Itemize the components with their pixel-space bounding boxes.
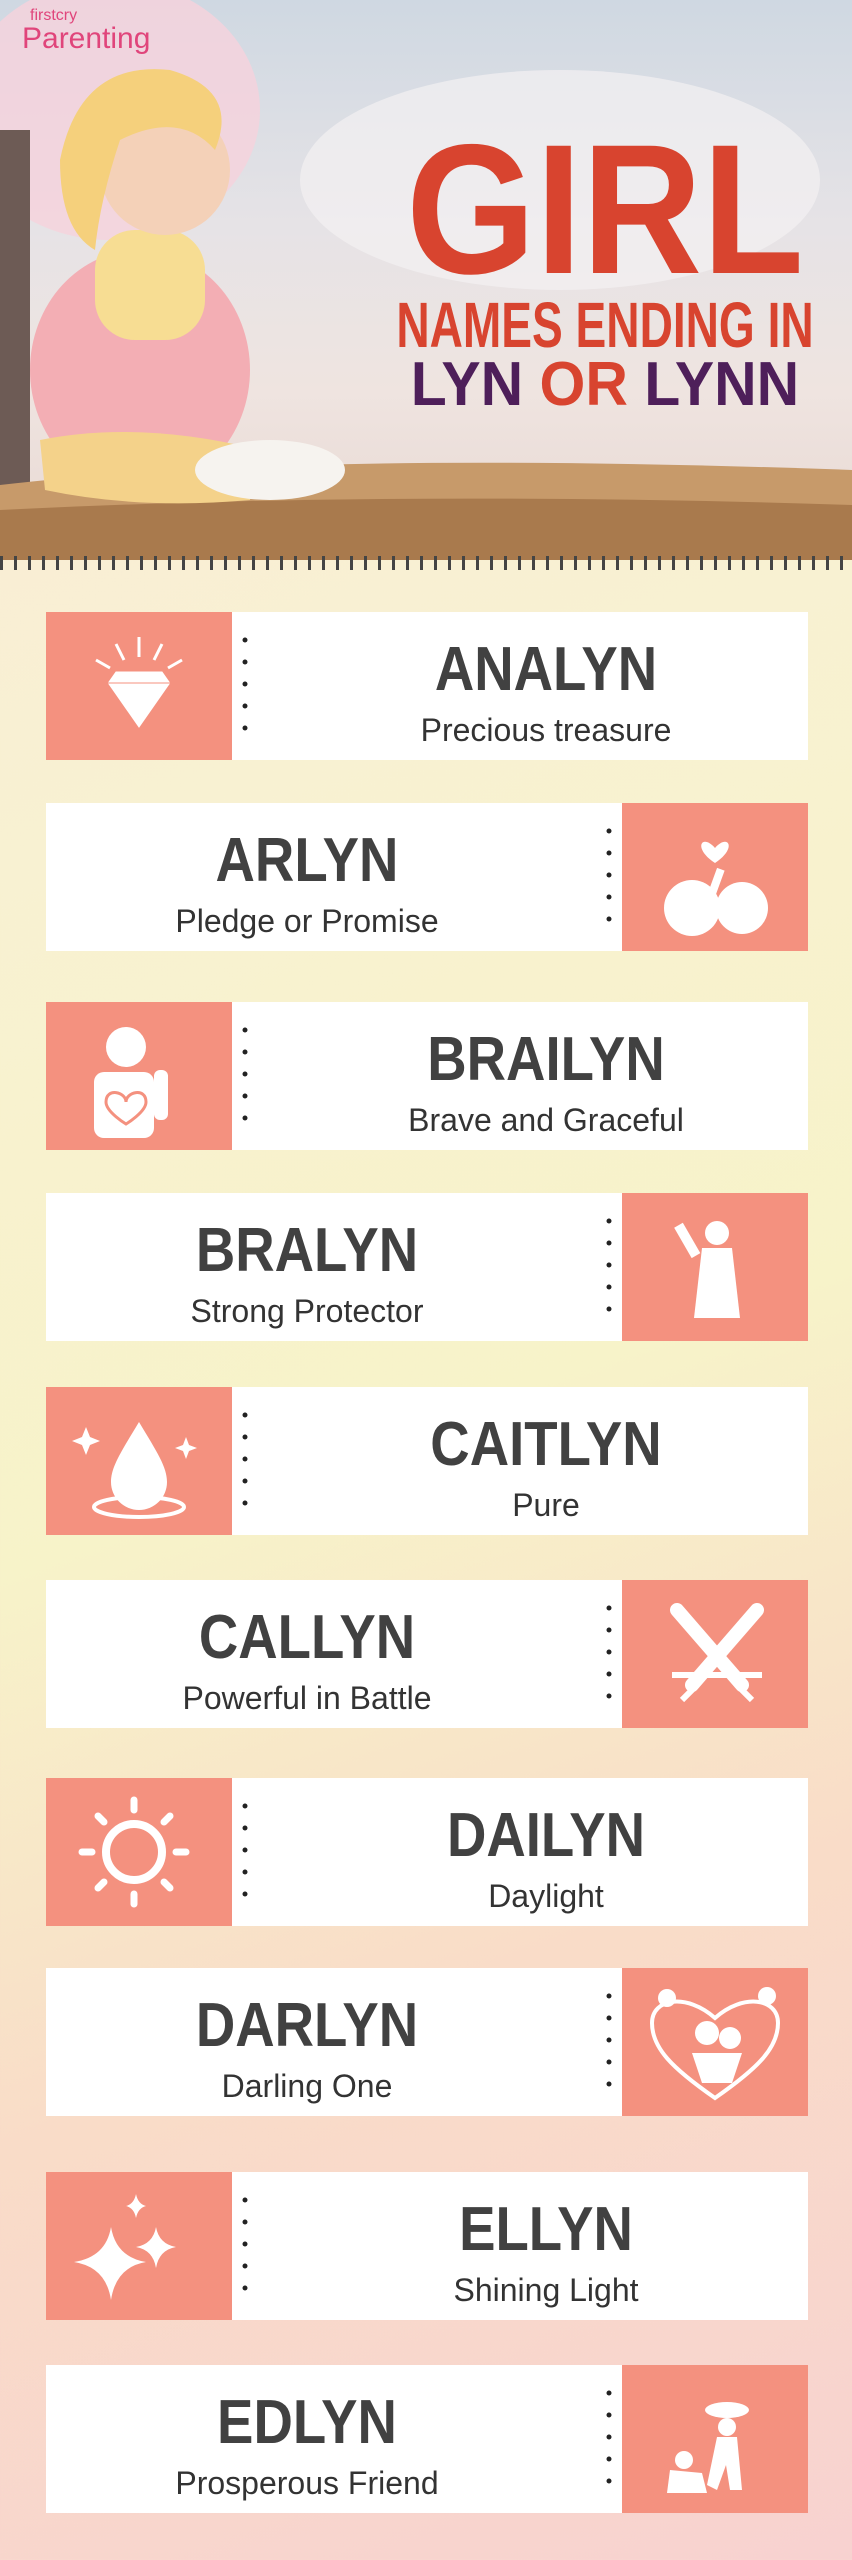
card: Callyn: CALLYN (199, 1603, 415, 1672)
icon: sparkles (46, 2172, 232, 2320)
title: LYN OR LYNN (411, 350, 799, 419)
card: Dailyn: DAILYN (447, 1801, 645, 1870)
title: GIRL (406, 107, 804, 313)
card: Edlyn (46, 2365, 808, 2513)
card: Dailyn (46, 1778, 808, 1926)
card: Analyn: ANALYN (435, 635, 657, 704)
icon: superhero (622, 1193, 808, 1341)
card: Bralyn (46, 1193, 808, 1341)
card: Darlyn (46, 1968, 808, 2116)
card: Callyn: Powerful in Battle (182, 1680, 432, 1716)
card: Caitlyn: CAITLYN (430, 1410, 662, 1479)
icon: sun (46, 1778, 232, 1926)
card: Brailyn: Brave and Graceful (408, 1102, 684, 1138)
card: Ellyn: Shining Light (453, 2272, 639, 2308)
card: Brailyn: BRAILYN (427, 1025, 665, 1094)
card: Caitlyn (46, 1387, 808, 1535)
logo: firstcry (30, 7, 77, 24)
icon: drop (46, 1387, 232, 1535)
icon: diamond (46, 612, 232, 760)
spiral strip (0, 556, 852, 570)
card: Dailyn: Daylight (488, 1878, 604, 1914)
card: Brailyn (46, 1002, 808, 1150)
card: Analyn (46, 612, 808, 760)
title: NAMES ENDING IN (396, 289, 814, 361)
card: Darlyn: DARLYN (196, 1991, 418, 2060)
card: Bralyn: Strong Protector (190, 1293, 424, 1329)
card: Darlyn: Darling One (222, 2068, 392, 2104)
card: Ellyn: ELLYN (459, 2195, 633, 2264)
card: Edlyn: EDLYN (217, 2388, 397, 2457)
icon: heart hand (46, 1002, 232, 1150)
card: Edlyn: Prosperous Friend (175, 2465, 439, 2501)
icon: heart hug (622, 1968, 808, 2116)
card: Arlyn (46, 803, 808, 951)
card: Ellyn (46, 2172, 808, 2320)
card: Arlyn: ARLYN (216, 826, 398, 895)
card: Caitlyn: Pure (512, 1487, 580, 1523)
card: Bralyn: BRALYN (196, 1216, 418, 1285)
card: Callyn (46, 1580, 808, 1728)
card: Arlyn: Pledge or Promise (175, 903, 439, 939)
logo: Parenting (22, 22, 150, 55)
card: Analyn: Precious treasure (421, 712, 671, 748)
logo (22, 7, 150, 55)
icon: swords (622, 1580, 808, 1728)
title (396, 107, 814, 419)
header image (0, 0, 852, 560)
icon: promise (622, 803, 808, 951)
icon: umbrella friend (622, 2365, 808, 2513)
